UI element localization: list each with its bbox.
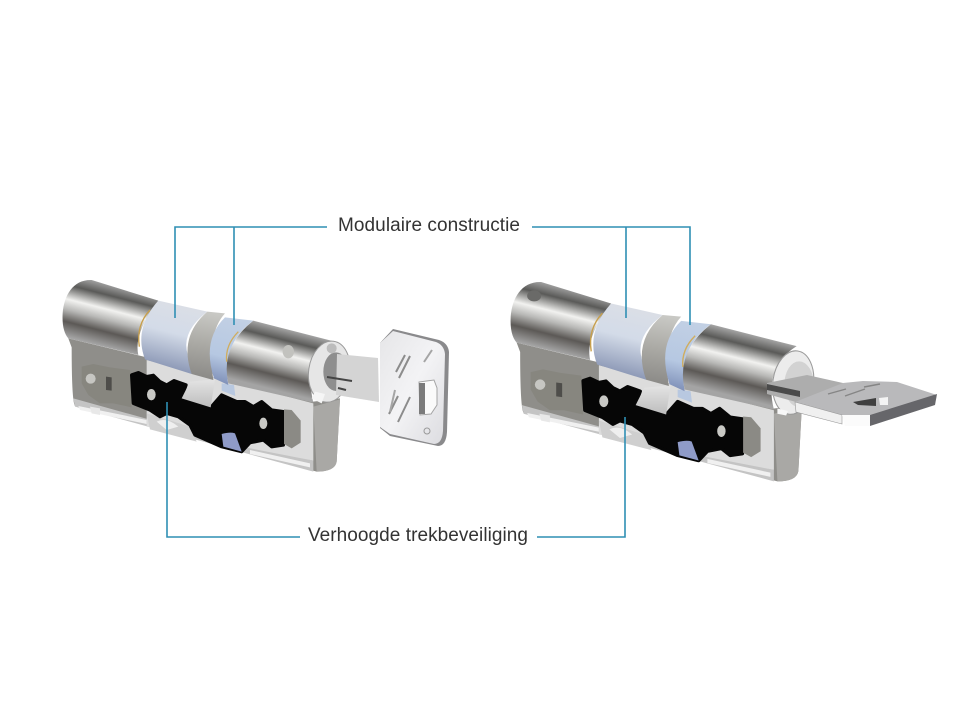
callout lines: Modulaire constructie [175,227,690,325]
key head [795,381,937,416]
callout lines: Verhoogde trekbeveiliging [167,402,625,537]
right cylinder lock with key [511,282,937,481]
key shank [336,354,379,402]
key head [380,329,449,446]
left cylinder lock with key [63,280,449,472]
heading: Modulaire constructie: Modulaire constructie [338,215,520,236]
key shank [767,375,845,412]
cylinder body cutaway [63,280,354,472]
cylinder body cutaway [511,282,818,481]
heading: Verhoogde trekbeveiliging: Verhoogde trekbeveiliging [308,525,528,546]
